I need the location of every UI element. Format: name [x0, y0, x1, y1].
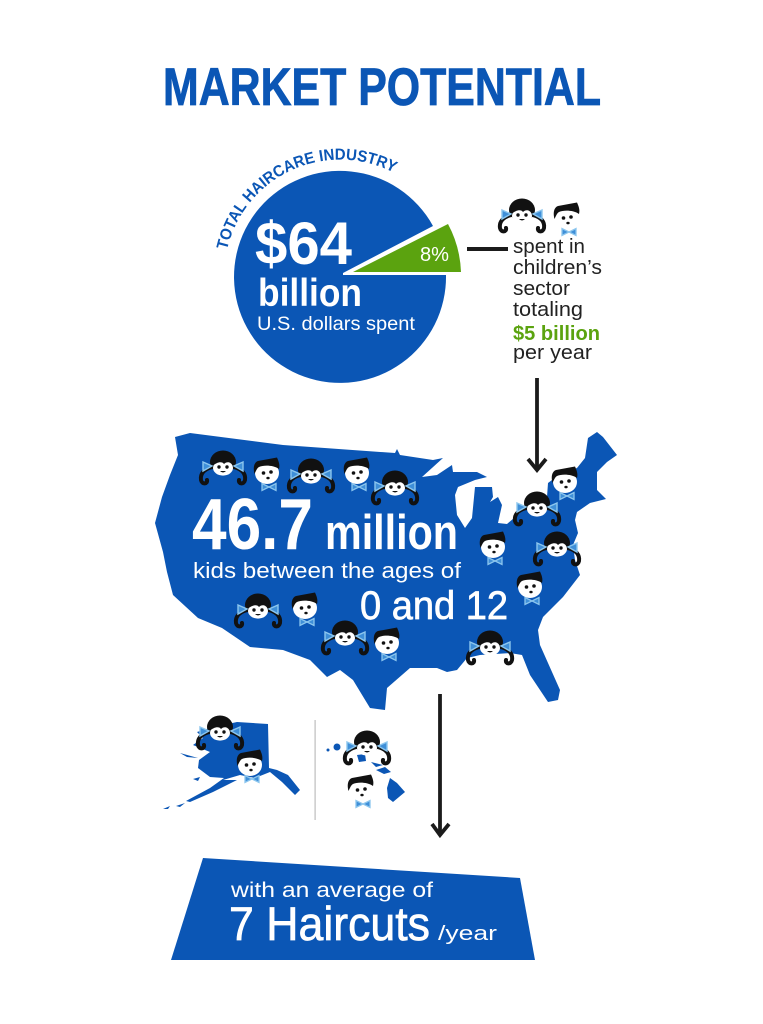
text: 7 Haircuts: 7 Haircuts: [229, 897, 430, 950]
icon: girl: [289, 458, 333, 491]
label: $64: $64: [255, 210, 353, 277]
icon: boy: [517, 572, 542, 604]
icon: boy: [344, 458, 369, 490]
icon: girl: [515, 492, 559, 524]
icon: girl: [468, 630, 512, 663]
panel: haircare industry pie chart: [216, 148, 461, 383]
banner shape: [171, 858, 535, 960]
icon: boy: [237, 750, 262, 782]
text block: children's sector: [513, 236, 602, 364]
text: with an average of: with an average of: [230, 879, 433, 902]
icon: girl: [535, 532, 579, 564]
icon: girl: [323, 620, 367, 653]
map headline: million: million: [325, 506, 458, 560]
text block: children's sector: totaling: [513, 299, 583, 321]
text block: children's sector: sector: [513, 278, 570, 300]
label: U.S. dollars spent: U.S. dollars spent: [257, 313, 416, 335]
map text: 0 and 12: 0 and 12: [360, 584, 508, 628]
icon: girl: [236, 594, 280, 626]
text block: children's sector: spent in: [513, 236, 585, 258]
icon: girl: [345, 730, 389, 763]
title: MARKET POTENTIAL: [163, 58, 601, 117]
map headline: 46.7: 46.7: [192, 485, 313, 565]
map text: kids between the ages of: kids between the ages of: [193, 558, 462, 583]
pie: main blue slice: [234, 171, 446, 383]
map: Hawaii: [326, 744, 405, 802]
icon: boy: [254, 458, 279, 490]
pie: green 8 percent slice: [353, 224, 461, 272]
label: 8 percent: 8%: [420, 244, 449, 266]
panel: haircuts banner: [171, 858, 535, 960]
curved heading: TOTAL HAIRCARE INDUSTRY: [216, 148, 398, 248]
icon: boy: [348, 774, 373, 808]
text block: children's sector: per year: [513, 342, 592, 364]
connector dash: [467, 247, 508, 251]
text block: children's sector: children’s: [513, 257, 602, 279]
arrow: to haircuts: [432, 694, 449, 835]
text block: children's sector: $5 billion: [513, 323, 600, 345]
arrow: to map: [528, 378, 546, 470]
icon: boy: [480, 532, 505, 564]
icon: girl: [201, 450, 245, 483]
map: Alaska: [163, 722, 300, 809]
label: billion: billion: [258, 272, 362, 315]
icon: boy: [292, 592, 317, 626]
icon: boy: [552, 466, 577, 500]
icon: girl top: [500, 198, 544, 231]
icon: girl: [198, 716, 242, 748]
divider: [314, 720, 316, 820]
text: per year: /year: [438, 923, 497, 945]
icon: boy: [374, 628, 399, 660]
icon: boy top: [554, 202, 579, 236]
map: contiguous United States: [155, 432, 617, 710]
icon: girl: [373, 470, 417, 503]
